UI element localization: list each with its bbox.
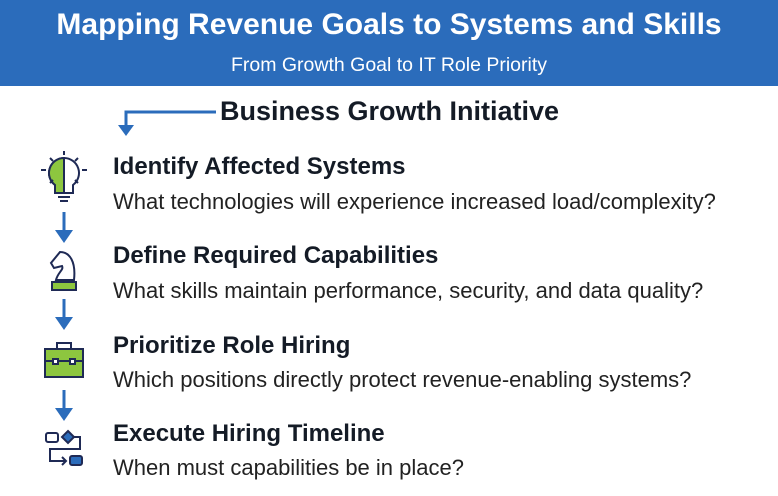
icon: briefcase <box>44 342 84 378</box>
step 4 heading: Execute Hiring Timeline <box>113 420 385 447</box>
step 2 heading: Define Required Capabilities <box>113 242 438 269</box>
icon: chess knight <box>50 251 77 291</box>
arrow 1 <box>55 212 73 243</box>
arrow: initiative to steps <box>118 110 216 136</box>
arrow 2 <box>55 299 73 330</box>
subtitle: From Growth Goal to IT Role Priority <box>231 54 547 76</box>
step 3 heading: Prioritize Role Hiring <box>113 332 350 359</box>
heading: business growth initiative: Business Growth Initiative <box>220 96 559 126</box>
header <box>0 0 778 86</box>
title: Mapping Revenue Goals to Systems and Skills <box>56 8 722 41</box>
icon: brain bulb <box>41 151 87 202</box>
arrow 3 <box>55 390 73 421</box>
step 2 description: What skills maintain performance, security, and data quality? <box>113 278 703 303</box>
step 1 description: What technologies will experience increased load/complexity? <box>113 189 716 214</box>
icon: workflow <box>45 430 83 466</box>
step 1 heading: Identify Affected Systems <box>113 153 406 180</box>
step 4 description: When must capabilities be in place? <box>113 455 464 480</box>
step 3 description: Which positions directly protect revenue-enabling systems? <box>113 367 691 392</box>
